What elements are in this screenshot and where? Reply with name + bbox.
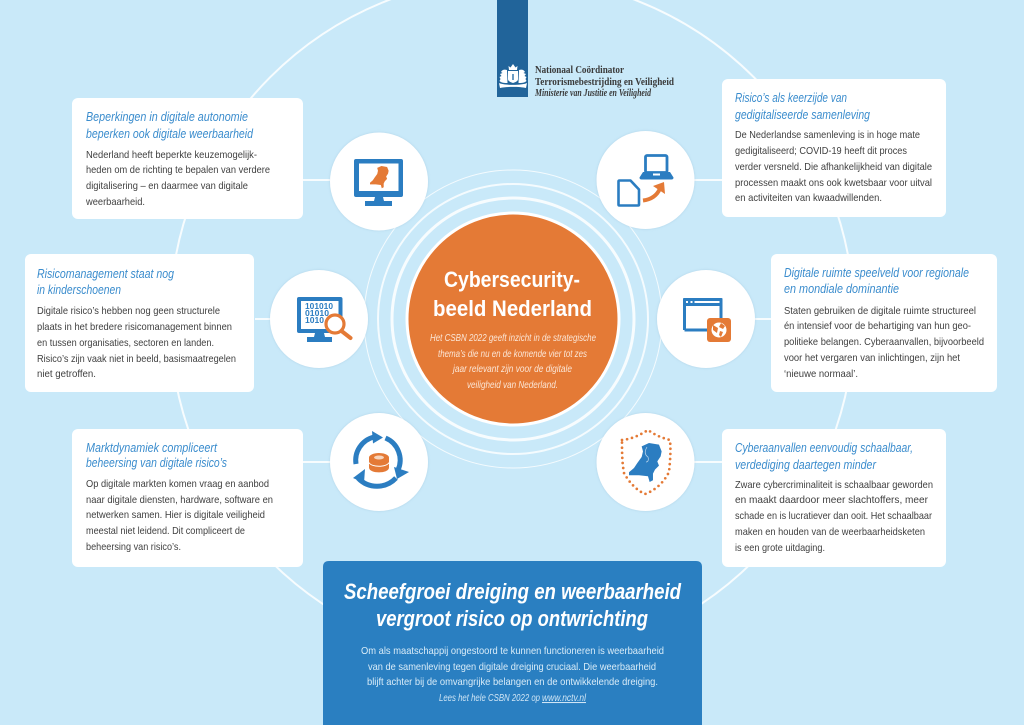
body text: voor het vergaren van inlichtingen, zijn het <box>784 352 960 364</box>
central text: thema’s die nu en de komende vier tot zes <box>438 348 588 360</box>
heading: in kinderschoenen <box>37 283 121 297</box>
body text: Op digitale markten komen vraag en aanbod <box>86 478 269 490</box>
central circle <box>407 213 619 425</box>
central heading: Cybersecurity- <box>444 267 580 292</box>
icon: document to laptop <box>596 131 694 229</box>
icon: coat of arms <box>499 64 527 88</box>
conclusion text: van de samenleving tegen digitale dreiging cruciaal. Die weerbaarheid <box>368 661 656 673</box>
body text: maken en houden van de weerbaarheidsketen <box>735 526 925 538</box>
body text: Staten gebruiken de digitale ruimte structureel <box>784 305 976 317</box>
logo text: Terrorismebestrijding en Veiligheid <box>535 77 674 88</box>
central heading: beeld Nederland <box>433 296 592 321</box>
body text: Digitale risico’s hebben nog geen structurele <box>37 305 220 317</box>
logo ribbon <box>497 0 528 97</box>
body text: processen maakt ons ook kwetsbaar voor uitval <box>735 177 932 189</box>
body text <box>85 149 270 208</box>
body text: Zware cybercriminaliteit is schaalbaar geworden <box>735 479 933 491</box>
conclusion heading: Scheefgroei dreiging en weerbaarheid <box>344 579 681 604</box>
body text: Risico’s zijn vaak niet in beeld, basismaatregelen <box>37 353 236 365</box>
heading: Risico’s als keerzijde van <box>735 91 847 105</box>
heading: verdediging daartegen minder <box>735 458 877 472</box>
body text: De Nederlandse samenleving is in hoge mate <box>735 129 920 141</box>
heading <box>784 266 969 296</box>
body text: en tussen organisaties, sectoren en landen. <box>37 337 214 349</box>
central text <box>430 332 596 391</box>
panel: conclusion <box>323 561 702 725</box>
panel: digitale ruimte <box>771 254 997 392</box>
body text: én intensief voor de behartiging van hun geo- <box>784 320 971 332</box>
heading: Risicomanagement staat nog <box>37 267 174 281</box>
heading <box>86 441 227 470</box>
heading: en mondiale dominantie <box>784 282 899 296</box>
central text: jaar relevant zijn voor de digitale <box>451 363 572 375</box>
logo text: Ministerie van Justitie en Veiligheid <box>534 88 652 99</box>
icon: monitor with binary code and magnifier: 101010 <box>305 302 334 311</box>
body text <box>735 129 932 204</box>
conclusion text: Om als maatschappij ongestoord te kunnen functioneren is weerbaarheid <box>361 645 664 657</box>
heading: Marktdynamiek compliceert <box>86 441 217 455</box>
heading: gedigitaliseerde samenleving <box>735 108 870 122</box>
icon: monitor with binary code and magnifier: 01010 <box>305 309 330 318</box>
body text: beheersing van risico’s. <box>86 541 181 553</box>
body text: Nederland heeft beperkte keuzemogelijk- <box>86 149 257 161</box>
body text <box>37 305 236 380</box>
logo text <box>534 65 674 99</box>
central heading <box>433 267 592 321</box>
body text: naar digitale diensten, hardware, software en <box>86 494 273 506</box>
central text: Het CSBN 2022 geeft inzicht in de strategische <box>430 332 596 344</box>
panel: keerzijde samenleving <box>722 79 946 217</box>
body text: digitalisering – en daarmee van digitale <box>86 180 248 192</box>
body text: en maakt daardoor meer slachtoffers, meer <box>735 494 928 506</box>
link line: www.nctv.nl <box>542 692 587 704</box>
heading <box>37 267 174 297</box>
panel: risicomanagement <box>25 254 254 392</box>
conclusion heading <box>344 579 681 631</box>
panel: digitale autonomie <box>72 98 303 219</box>
icon: monitor with binary code and magnifier: 1010 <box>305 316 325 325</box>
body text: schade en is lucratiever dan ooit. Het schaalbaar <box>735 510 932 522</box>
conclusion heading: vergroot risico op ontwrichting <box>376 606 648 631</box>
body text: is een grote uitdaging. <box>735 542 825 554</box>
icon: monitor with the Netherlands <box>330 132 428 230</box>
body text: niet getroffen. <box>37 368 96 380</box>
logo text: Nationaal Coördinator <box>535 65 625 76</box>
panel: cyberaanvallen <box>722 429 946 567</box>
link line: Lees het hele CSBN 2022 op <box>439 692 540 704</box>
heading <box>86 110 254 141</box>
body text: politieke belangen. Cyberaanvallen, bijvoorbeeld <box>784 336 984 348</box>
body text: ‘nieuwe normaal’. <box>784 368 858 380</box>
body text: meestal niet leidend. Dit compliceert de <box>86 525 245 537</box>
icon: monitor with binary code and magnifier <box>270 270 368 368</box>
icon: shield with the Netherlands <box>596 413 694 511</box>
heading: beheersing van digitale risico’s <box>86 456 227 470</box>
icon: browser window with globe <box>657 270 755 368</box>
body text: weerbaarheid. <box>85 196 145 208</box>
header logo <box>497 0 674 99</box>
heading: Digitale ruimte speelveld voor regionale <box>784 266 969 280</box>
body text: netwerken samen. Hier is digitale veiligheid <box>86 509 265 521</box>
body text <box>784 305 984 380</box>
body text: heden om de richting te bepalen van verdere <box>86 164 270 176</box>
heading: Cyberaanvallen eenvoudig schaalbaar, <box>735 441 913 455</box>
icon: cycle arrows with coins <box>330 413 428 511</box>
panel: marktdynamiek <box>72 429 303 567</box>
heading <box>735 91 870 122</box>
heading <box>735 441 913 472</box>
body text: en activiteiten van kwaadwillenden. <box>735 192 882 204</box>
conclusion text <box>361 645 664 688</box>
body text: verder versneld. Die afhankelijkheid van digitale <box>735 161 932 173</box>
body text <box>86 478 273 553</box>
central text: veiligheid van Nederland. <box>467 379 558 391</box>
body text: plaats in het bredere risicomanagement binnen <box>37 321 232 333</box>
heading: Beperkingen in digitale autonomie <box>86 110 248 124</box>
heading: beperken ook digitale weerbaarheid <box>86 127 254 141</box>
conclusion text: blijft achter bij de omvangrijke belangen en de ontwikkelende dreiging. <box>367 676 658 688</box>
body text: gedigitaliseerd; COVID-19 heeft dit proces <box>735 145 907 157</box>
body text <box>735 479 933 554</box>
